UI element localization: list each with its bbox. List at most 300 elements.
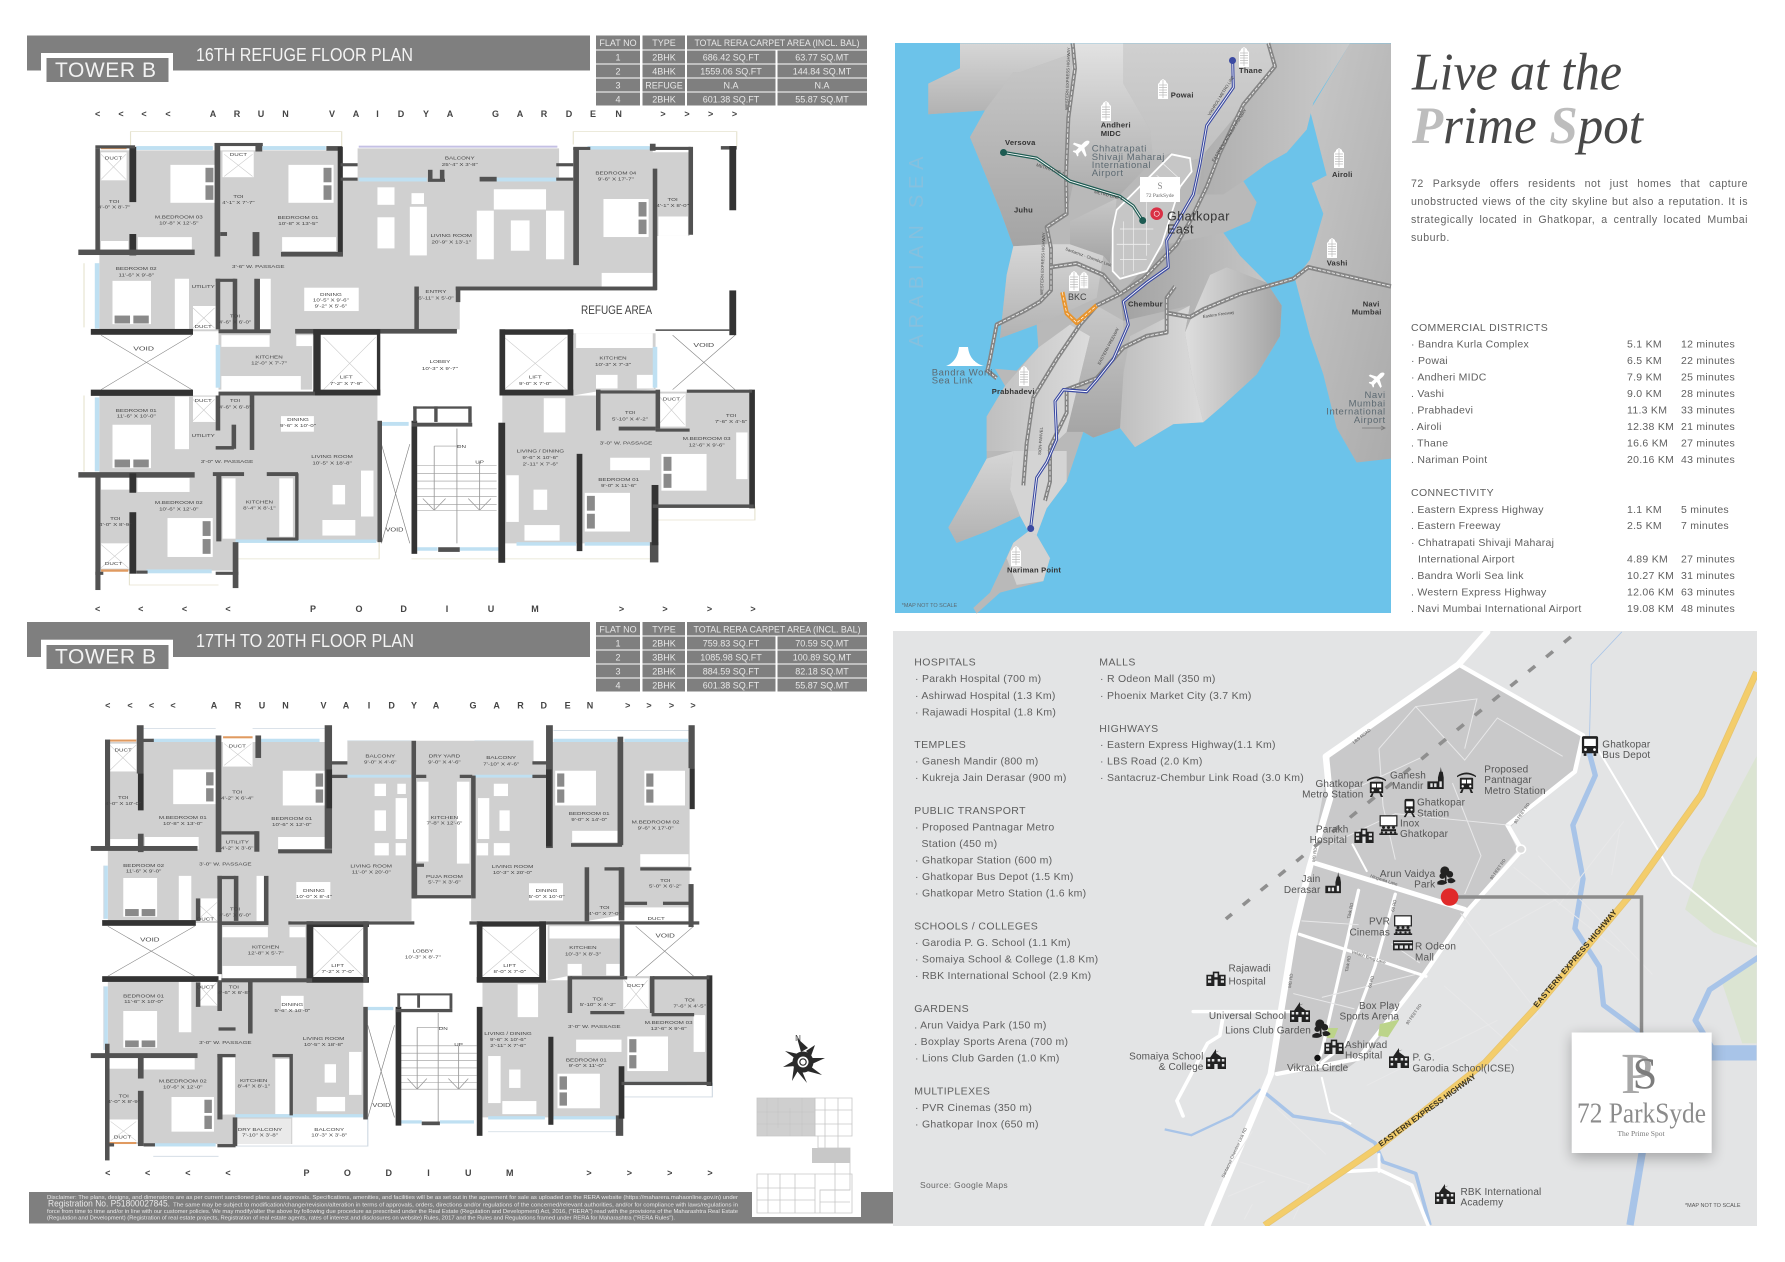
table: flat areas 16th floor: TYPE bbox=[652, 38, 676, 48]
icon: plane Chhatrapati Shivaji airport bbox=[1073, 141, 1089, 157]
room labels: DUCT bbox=[195, 325, 213, 330]
place labels: P. G. bbox=[1412, 1052, 1435, 1064]
room labels: BALCONY bbox=[314, 1128, 345, 1133]
room labels: DINING bbox=[320, 293, 342, 297]
tab: tower B lower: TOWER B bbox=[55, 646, 156, 668]
map labels: Powai bbox=[1171, 90, 1194, 100]
void crosses bbox=[101, 335, 735, 543]
place labels: Proposed bbox=[1484, 764, 1528, 776]
direction label: podium: <<<<PODIUM>>>> bbox=[95, 604, 756, 614]
highways bbox=[987, 43, 1391, 501]
list: connectivity distances: . Western Express Highway bbox=[1411, 586, 1547, 598]
list: malls and highways: HIGHWAYS bbox=[1099, 723, 1159, 735]
room labels: 4'-0" X 7'-0" bbox=[588, 911, 621, 916]
void crosses bbox=[108, 926, 694, 1117]
logo card: 72 ParkSyde bbox=[1572, 1032, 1712, 1158]
room labels: LIFT bbox=[331, 964, 345, 969]
room floors bbox=[108, 741, 710, 1144]
room labels: 10'-3" X 20'-0" bbox=[493, 871, 532, 876]
table: flat areas 16th floor: REFUGE bbox=[645, 80, 683, 90]
list: commercial districts distances: 9.0 KM bbox=[1627, 388, 1662, 400]
map labels: Nariman Point bbox=[1007, 566, 1061, 575]
room labels: DINING bbox=[303, 889, 325, 893]
green open space bbox=[1685, 756, 1757, 948]
room labels: 10'-8" X 12'-5" bbox=[159, 221, 199, 226]
list: commercial districts distances bbox=[1411, 322, 1735, 466]
room labels: BEDROOM 01 bbox=[123, 994, 164, 999]
table: flat areas 16th floor: N.A bbox=[723, 80, 739, 90]
room labels: 12'-6" X 9'-6" bbox=[651, 1027, 687, 1031]
paragraph: project description bbox=[1411, 178, 1748, 244]
room labels: 9'-0" X 4'-6" bbox=[428, 760, 461, 765]
road labels: 90 FEET RD bbox=[1513, 802, 1531, 825]
room labels: 5'-10" X 4'-2" bbox=[580, 1003, 616, 1008]
room labels: 5'-6" X 10'-0" bbox=[274, 1008, 310, 1013]
list: commercial districts distances: 21 minutes bbox=[1681, 421, 1735, 433]
list: commercial districts distances: 22 minutes bbox=[1681, 355, 1735, 367]
room labels: M.BEDROOM 03 bbox=[645, 1021, 693, 1026]
header bar: 16th refuge floor plan bbox=[27, 36, 590, 82]
table: flat areas 17th to 20th floor: 55.87 SQ.MT bbox=[795, 680, 849, 690]
table: flat areas 16th floor: 144.84 SQ.MT bbox=[793, 66, 852, 76]
room labels: 9'-0" X 14'-0" bbox=[571, 818, 607, 823]
list: hospitals, temples, transport, schools, gardens, multiplexes: · Ashirwad Hospital (1.3 Km) bbox=[915, 690, 1056, 702]
map labels: BKC bbox=[1068, 292, 1087, 302]
place labels: Universal School bbox=[1209, 1011, 1286, 1022]
place labels: Metro Station bbox=[1484, 786, 1546, 797]
table: flat areas 16th floor bbox=[596, 36, 867, 106]
place labels: Hospital bbox=[1345, 1050, 1382, 1062]
room labels: DUCT bbox=[195, 399, 213, 404]
leader line to logo bbox=[1456, 897, 1642, 1035]
Ghatkopar area outline bbox=[1113, 154, 1192, 279]
room labels: DRY YARD bbox=[429, 754, 460, 759]
place labels: Arun Vaidya bbox=[1380, 869, 1436, 880]
room labels: 9'-0" X 7'-0" bbox=[519, 382, 552, 387]
table: flat areas 17th to 20th floor: 884.59 SQ.FT bbox=[703, 666, 760, 676]
list: connectivity distances: 7 minutes bbox=[1681, 520, 1729, 532]
room labels: DINING bbox=[536, 889, 558, 893]
room labels: UTILITY bbox=[192, 434, 215, 439]
room labels: ENTRY bbox=[425, 290, 447, 295]
direction label: podium lower: <<<<PODIUM>>>> bbox=[105, 1168, 713, 1178]
room labels: LIFT bbox=[340, 375, 353, 380]
room labels: 4'-0" X 8'-9" bbox=[99, 523, 132, 528]
room labels: 11'-6" X 9'-8" bbox=[118, 273, 154, 278]
room labels: DN bbox=[457, 445, 466, 450]
list: connectivity distances: 5 minutes bbox=[1681, 504, 1729, 516]
room labels: 4'-0" X 10'-0" bbox=[105, 802, 141, 807]
room labels: KITCHEN bbox=[246, 500, 273, 505]
beds bbox=[112, 165, 707, 557]
icon: north compass bbox=[783, 1034, 825, 1083]
list: hospitals, temples, transport, schools, gardens, multiplexes: TEMPLES bbox=[914, 739, 966, 751]
room labels: 9'-6" X 10'-6" bbox=[490, 1038, 526, 1043]
table: flat areas 17th to 20th floor: 601.38 SQ.FT bbox=[703, 680, 760, 690]
table: flat areas 16th floor: TOTAL RERA CARPET AREA (INCL. BAL) bbox=[694, 38, 860, 48]
list: hospitals, temples, transport, schools, gardens, multiplexes: . Boxplay Sports Arena (700 m) bbox=[914, 1036, 1068, 1048]
room labels: 2'-11" X 7'-6" bbox=[523, 462, 558, 467]
place labels: Hospital bbox=[1228, 976, 1266, 988]
room labels: 4'-2" X 3'-6" bbox=[221, 846, 254, 851]
list: commercial districts distances: . Airoli bbox=[1411, 421, 1442, 433]
list: hospitals, temples, transport, schools, gardens, multiplexes: SCHOOLS / COLLEGES bbox=[914, 920, 1038, 932]
room labels: LIVING ROOM bbox=[350, 864, 393, 869]
place labels: Derasar bbox=[1284, 885, 1321, 896]
list: commercial districts distances: · Andheri MIDC bbox=[1411, 372, 1487, 384]
list: connectivity distances: 10.27 KM bbox=[1627, 570, 1674, 582]
list: commercial districts distances: · Powai bbox=[1411, 355, 1448, 367]
table: flat areas 17th to 20th floor bbox=[596, 622, 867, 692]
room labels: DUCT bbox=[105, 156, 123, 161]
room labels: 10'-3" X 3'-8" bbox=[311, 1133, 347, 1138]
list: hospitals, temples, transport, schools, gardens, multiplexes: · Lions Club Garden (1.0 Km) bbox=[915, 1052, 1060, 1064]
room labels: M.BEDROOM 03 bbox=[683, 437, 731, 442]
map labels: Prabhadevi bbox=[992, 387, 1035, 396]
map labels: MIDC bbox=[1101, 129, 1121, 138]
disclaimer bar: force from time to time and/or in line with our customer policies. We may modify/alter the above by following due procedure as prescribed under the Real Estate (Regulation and Development) Act, 2016, ("RERA") read with the provisions of the Maharashtra Real Estate bbox=[47, 1209, 738, 1215]
logo tag on map: 72 ParkSyde bbox=[1146, 193, 1175, 199]
room labels: 10'-0" X 8'-4" bbox=[296, 895, 332, 900]
room labels: BALCONY bbox=[445, 156, 475, 161]
room labels: BALCONY bbox=[486, 756, 517, 761]
key plan thumbnail bbox=[752, 1095, 861, 1217]
room labels: DUCT bbox=[229, 744, 247, 749]
road labels on map: WESTERN EXPRESS HIGHWAY bbox=[1064, 47, 1071, 110]
list: commercial districts distances: 28 minutes bbox=[1681, 388, 1735, 400]
room labels: 7'-6" X 4'-5" bbox=[673, 1004, 706, 1009]
list: hospitals, temples, transport, schools, gardens, multiplexes: MULTIPLEXES bbox=[914, 1086, 990, 1098]
room labels: LOBBY bbox=[412, 949, 434, 954]
road labels on map: EASTERN FREEWAY bbox=[1096, 327, 1120, 365]
list: commercial districts distances: . Vashi bbox=[1411, 388, 1444, 400]
place labels: *MAP NOT TO SCALE bbox=[1685, 1203, 1741, 1209]
table: flat areas 17th to 20th floor: 1 bbox=[615, 638, 621, 648]
list: commercial districts distances: 12.38 KM bbox=[1627, 421, 1674, 433]
room labels: 9'-6" X 17'-0" bbox=[638, 826, 674, 831]
table: flat areas 17th to 20th floor: 2 bbox=[615, 652, 621, 662]
map labels: Chhatrapati bbox=[1092, 144, 1147, 155]
place labels: Jain bbox=[1302, 874, 1320, 885]
room labels: 4'-6" X 6'-8" bbox=[218, 991, 250, 996]
place labels: Ghatkopar bbox=[1400, 829, 1449, 840]
room labels: BEDROOM 01 bbox=[569, 812, 610, 817]
list: malls and highways: MALLS bbox=[1099, 656, 1136, 668]
room labels: 10'-8" X 13'-5" bbox=[278, 222, 318, 227]
room labels: TOI bbox=[110, 517, 120, 522]
room labels: DINING bbox=[281, 1003, 303, 1008]
list: connectivity distances: · Chhatrapati Shivaji Maharaj bbox=[1411, 537, 1554, 549]
room labels: TOI bbox=[230, 399, 240, 404]
table: flat areas 16th floor: 4 bbox=[615, 94, 621, 104]
place labels: & College bbox=[1159, 1062, 1204, 1073]
table: flat areas 16th floor: 601.38 SQ.FT bbox=[703, 94, 760, 104]
place labels: Parakh bbox=[1316, 824, 1348, 836]
table: flat areas 17th to 20th floor: 3BHK bbox=[652, 652, 676, 662]
room floors bbox=[98, 148, 749, 571]
room labels: TOI bbox=[599, 906, 610, 911]
room labels: TOI bbox=[229, 985, 240, 990]
room labels: DUCT bbox=[114, 1135, 132, 1140]
place labels: RBK International bbox=[1460, 1187, 1541, 1198]
room labels: 8'-4" X 8'-1" bbox=[237, 1084, 270, 1089]
disclaimer bar: Disclaimer: The plans, designs, and dimensions are as per current sanctioned plans and approvals. Specifications, amenities, and facilities will be as set out in the agreement for sale as uploaded on the RERA website (https://maharera.mahaonline.gov.in) under bbox=[47, 1195, 738, 1201]
table: flat areas 17th to 20th floor: FLAT NO bbox=[599, 624, 637, 634]
rivers bbox=[1165, 632, 1759, 1225]
room labels: 3'-0" W. PASSAGE bbox=[199, 1041, 252, 1046]
road labels: LBS ROAD bbox=[1352, 727, 1372, 745]
highway labels: EASTERN EXPRESS HIGHWAY bbox=[1377, 1072, 1478, 1149]
list: commercial districts distances: 12 minutes bbox=[1681, 338, 1735, 350]
room labels: 9'-0" X 11'-6" bbox=[601, 484, 637, 489]
logo monogram PS: P bbox=[1621, 1041, 1653, 1106]
room labels: 5'-0" X 10'-0" bbox=[529, 895, 565, 900]
list: hospitals, temples, transport, schools, gardens, multiplexes: · Ghatkopar Inox (650 m) bbox=[915, 1118, 1039, 1130]
room labels: 10'-3" X 7'-3" bbox=[595, 363, 631, 368]
room labels: M.BEDROOM 02 bbox=[155, 501, 203, 506]
stair bbox=[400, 1013, 477, 1122]
table: flat areas 16th floor: 63.77 SQ.MT bbox=[795, 52, 849, 62]
place labels: Lions Club Garden bbox=[1225, 1026, 1311, 1036]
room labels: 10'-6" X 12'-0" bbox=[163, 1085, 203, 1090]
room labels: TOI bbox=[593, 997, 603, 1002]
table: flat areas 17th to 20th floor: 2BHK bbox=[652, 666, 676, 676]
paragraph: project description: 72 Parksyde offers residents not just homes that capture bbox=[1411, 178, 1748, 190]
room labels: M.BEDROOM 01 bbox=[159, 816, 207, 821]
map labels: Sea Link bbox=[932, 376, 973, 387]
eastern freeway orange segment bbox=[1062, 292, 1097, 323]
list: connectivity distances: . Eastern Freeway bbox=[1411, 520, 1501, 532]
road labels: MG RD bbox=[1287, 973, 1294, 988]
room labels: KITCHEN bbox=[252, 945, 279, 950]
room labels: TOI bbox=[119, 1094, 129, 1099]
room labels: 11'-6" X 10'-0" bbox=[124, 1000, 163, 1005]
list: connectivity distances: CONNECTIVITY bbox=[1411, 487, 1494, 499]
room labels: BALCONY bbox=[365, 754, 396, 759]
road labels: 90 FEET RD bbox=[1405, 1003, 1423, 1026]
list: connectivity distances: 48 minutes bbox=[1681, 603, 1735, 615]
logo tag on map: S bbox=[1157, 181, 1163, 191]
list: commercial districts distances: 25 minutes bbox=[1681, 372, 1735, 384]
room labels: LIVING / DINING bbox=[484, 1032, 532, 1037]
room labels: BEDROOM 01 bbox=[566, 1058, 607, 1063]
walls bbox=[91, 725, 712, 1160]
list: hospitals, temples, transport, schools, gardens, multiplexes: · Ghatkopar Bus Depot (1.5 Km) bbox=[915, 871, 1074, 883]
place labels: R Odeon bbox=[1415, 942, 1456, 952]
icon: plane Navi Mumbai airport bbox=[1369, 373, 1385, 388]
table: flat areas 16th floor: 2BHK bbox=[652, 94, 676, 104]
room labels: 5'-7" X 3'-6" bbox=[428, 880, 461, 885]
outer terrace outlines bbox=[84, 132, 755, 585]
list: connectivity distances bbox=[1411, 487, 1735, 615]
floor plan: 16th refuge floor bbox=[78, 132, 755, 590]
disclaimer bar: (Regulation and Development) (Registration of real estate projects, Registration of real estate agents, rates of interest and disclosures on website) Rules, 2017 and the Rules and Regulations framed under RERA for Maharashtra ("RERA Rules"). bbox=[47, 1216, 675, 1222]
outer terrace outlines bbox=[104, 728, 712, 1156]
room labels: LIVING ROOM bbox=[303, 1037, 345, 1042]
railway dashed line bbox=[1226, 637, 1571, 919]
table: flat areas 16th floor: 2BHK bbox=[652, 52, 676, 62]
project location red marker bbox=[1441, 888, 1458, 906]
list: connectivity distances: . Navi Mumbai International Airport bbox=[1411, 603, 1582, 615]
map labels: Versova bbox=[1005, 138, 1036, 147]
list: hospitals, temples, transport, schools, gardens, multiplexes: · Kukreja Jain Derasar (900 m) bbox=[915, 772, 1067, 784]
room labels: DUCT bbox=[627, 984, 645, 988]
room labels: TOI bbox=[233, 195, 244, 199]
list: malls and highways: · Phoenix Market City (3.7 Km) bbox=[1100, 690, 1252, 702]
road labels: Tilak RD bbox=[1346, 902, 1354, 919]
heading: Live at the Prime Spot: Prime Spot bbox=[1411, 97, 1644, 155]
list: hospitals, temples, transport, schools, gardens, multiplexes: HOSPITALS bbox=[914, 656, 976, 668]
Vikrant Circle dot bbox=[1314, 1055, 1321, 1061]
list: commercial districts distances: . Prabhadevi bbox=[1411, 404, 1473, 416]
room labels: 10'-8" X 13'-0" bbox=[163, 822, 203, 827]
room labels: 7'-2" X 7'-9" bbox=[330, 382, 363, 387]
room labels: 10'-3" X 8'-3" bbox=[565, 952, 601, 957]
list: hospitals, temples, transport, schools, gardens, multiplexes: · PVR Cinemas (350 m) bbox=[915, 1102, 1032, 1114]
list: malls and highways: · Eastern Express Highway(1.1 Km) bbox=[1100, 739, 1276, 751]
room labels: 4'-6" X 6'-0" bbox=[219, 320, 251, 325]
room labels: DUCT bbox=[663, 397, 681, 402]
list: commercial districts distances: . Nariman Point bbox=[1411, 454, 1487, 466]
map labels: Juhu bbox=[1014, 206, 1033, 214]
highway labels bbox=[1377, 907, 1619, 1149]
room labels: M.BEDROOM 03 bbox=[155, 215, 203, 220]
room labels: BEDROOM 01 bbox=[116, 409, 157, 413]
road labels on map: EASTERN EXPRESS HIGHWAY bbox=[1211, 108, 1248, 163]
room labels: DRY BALCONY bbox=[238, 1128, 283, 1133]
room labels: M.BEDROOM 02 bbox=[159, 1079, 207, 1084]
road labels: 90 FEET RD bbox=[1489, 858, 1507, 881]
room labels: 10'-6" X 12'-0" bbox=[272, 823, 312, 828]
road labels: Tilak RD bbox=[1344, 955, 1352, 972]
list: connectivity distances: 1.1 KM bbox=[1627, 504, 1662, 516]
map labels: International bbox=[1326, 407, 1386, 418]
list: malls and highways: · Santacruz-Chembur Link Road (3.0 Km) bbox=[1100, 772, 1304, 784]
list: commercial districts distances: 33 minutes bbox=[1681, 404, 1735, 416]
room labels: BEDROOM 04 bbox=[595, 171, 636, 176]
road labels on map: SION-PANVEL bbox=[1037, 426, 1044, 455]
room labels: 11'-0" X 20'-0" bbox=[352, 870, 391, 875]
place labels: Ghatkopar bbox=[1602, 740, 1651, 750]
disclaimer bar: The same may be subject to modification/change/revision/alteration in terms of approvals, orders, directions and/or regulations of the concerned/relevant authorities, and/or for compliance with laws/regulations in bbox=[173, 1202, 738, 1208]
list: malls and highways: · LBS Road (2.0 Km) bbox=[1100, 756, 1203, 768]
room labels: 10'-6" X 12'-0" bbox=[159, 507, 199, 512]
table: flat areas 17th to 20th floor: 70.59 SQ.MT bbox=[795, 638, 849, 648]
place labels: Garodia School(ICSE) bbox=[1412, 1064, 1514, 1074]
place labels: Station bbox=[1417, 808, 1449, 820]
fixtures and furniture bbox=[110, 742, 705, 1144]
room labels: LIVING / DINING bbox=[517, 449, 564, 454]
table: flat areas 17th to 20th floor: 82.18 SQ.MT bbox=[795, 666, 849, 676]
list: hospitals, temples, transport, schools, gardens, multiplexes: GARDENS bbox=[914, 1003, 969, 1015]
table: flat areas 17th to 20th floor: TYPE bbox=[652, 624, 676, 634]
place labels: Sports Arena bbox=[1340, 1012, 1399, 1022]
room labels: 2'-11" X 7'-6" bbox=[490, 1044, 526, 1049]
room labels: VOID bbox=[133, 345, 154, 352]
table: flat areas 17th to 20th floor: 100.89 SQ.MT bbox=[793, 652, 852, 662]
heading: 16th refuge floor plan: 16TH REFUGE FLOOR PLAN bbox=[196, 45, 413, 65]
map labels: Airoli bbox=[1332, 170, 1353, 179]
room labels: 4'-0" X 8'-9" bbox=[107, 1100, 140, 1105]
place labels bbox=[1129, 740, 1741, 1209]
map labels: Ghatkopar bbox=[1167, 210, 1230, 224]
room labels: VOID bbox=[372, 1103, 391, 1109]
room labels: 7'-8" X 12'-6" bbox=[426, 821, 462, 826]
list: hospitals, temples, transport, schools, gardens, multiplexes: · Ghatkopar Station (600 m) bbox=[915, 854, 1052, 866]
table: flat areas 17th to 20th floor: 4 bbox=[615, 680, 621, 690]
list: hospitals, temples, transport, schools, gardens, multiplexes: · Garodia P. G. School (1.1 Km) bbox=[915, 937, 1071, 949]
windows bbox=[104, 739, 688, 1146]
place labels: PVR bbox=[1369, 916, 1390, 928]
metro line green bbox=[1003, 152, 1143, 221]
project location marker bbox=[1150, 207, 1163, 220]
map labels: Airport bbox=[1354, 415, 1386, 426]
list: hospitals, temples, transport, schools, gardens, multiplexes: . Arun Vaidya Park (150 m) bbox=[914, 1020, 1047, 1032]
table: flat areas 17th to 20th floor: 2BHK bbox=[652, 638, 676, 648]
list: commercial districts distances: 16.6 KM bbox=[1627, 438, 1668, 450]
room labels: 12'-8" X 5'-7" bbox=[248, 951, 284, 956]
list: commercial districts distances: COMMERCIAL DISTRICTS bbox=[1411, 322, 1548, 334]
room labels: 4'-0" X 8'-7" bbox=[98, 206, 130, 210]
room labels: 7'-10" X 4'-6" bbox=[483, 762, 519, 767]
place labels: Ghatkopar bbox=[1417, 798, 1466, 808]
main roads bbox=[1177, 632, 1757, 1225]
room labels: LIFT bbox=[529, 375, 543, 380]
room labels: BEDROOM 02 bbox=[116, 267, 157, 272]
room labels: 11'-6" X 9'-0" bbox=[126, 869, 161, 874]
place labels: Ashirwad bbox=[1345, 1040, 1387, 1051]
map labels: Thane bbox=[1239, 66, 1262, 75]
map labels: Mumbai bbox=[1352, 308, 1382, 317]
locator map: Mumbai region bbox=[895, 43, 1391, 614]
room labels: KITCHEN bbox=[431, 816, 458, 821]
place labels: Hospital bbox=[1310, 835, 1347, 846]
room labels: LIVING ROOM bbox=[311, 455, 353, 460]
list: hospitals, temples, transport, schools, gardens, multiplexes: · Ghatkopar Metro Station (1.6 km) bbox=[915, 888, 1086, 900]
place labels: Rajawadi bbox=[1228, 964, 1271, 974]
table: flat areas 16th floor: 2 bbox=[615, 66, 621, 76]
place labels: Ghatkopar bbox=[1315, 779, 1364, 790]
table: flat areas 16th floor: 686.42 SQ.FT bbox=[703, 52, 760, 62]
tab: tower B bbox=[41, 53, 173, 82]
table: flat areas 17th to 20th floor: 759.83 SQ.FT bbox=[703, 638, 760, 648]
metro terminals bbox=[1000, 57, 1236, 532]
logo tag on map bbox=[1140, 177, 1180, 202]
room labels: 9'-0" X 11'-0" bbox=[569, 1064, 604, 1069]
room labels: VOID bbox=[656, 934, 675, 939]
floor plan: 17th to 20th floor bbox=[91, 725, 712, 1160]
room labels: KITCHEN bbox=[240, 1078, 267, 1083]
list: hospitals, temples, transport, schools, gardens, multiplexes bbox=[914, 656, 1098, 1130]
heading: Live at the Prime Spot bbox=[1411, 44, 1644, 155]
place icons bbox=[1206, 736, 1598, 1204]
room labels: 4'-2" X 6'-4" bbox=[221, 796, 254, 801]
map labels: East bbox=[1167, 222, 1194, 236]
list: malls and highways: · R Odeon Mall (350 m) bbox=[1100, 673, 1216, 685]
room labels: 8'-0" X 7'-0" bbox=[493, 970, 526, 975]
room labels: 4'-1" X 8'-0" bbox=[656, 204, 689, 209]
list: commercial districts distances: . Thane bbox=[1411, 438, 1448, 450]
map labels: Chembur bbox=[1128, 300, 1163, 309]
room labels: KITCHEN bbox=[599, 356, 627, 361]
disclaimer bar bbox=[29, 1192, 893, 1224]
table: flat areas 17th to 20th floor: 1085.98 SQ.FT bbox=[700, 652, 762, 662]
room labels: DUCT bbox=[105, 562, 123, 567]
table: flat areas 16th floor: FLAT NO bbox=[599, 38, 637, 48]
room labels: TOI bbox=[667, 198, 678, 203]
road labels on map: Santacruz - Chembur Link bbox=[1065, 246, 1113, 268]
neighbourhood map panel bbox=[893, 631, 1759, 1226]
